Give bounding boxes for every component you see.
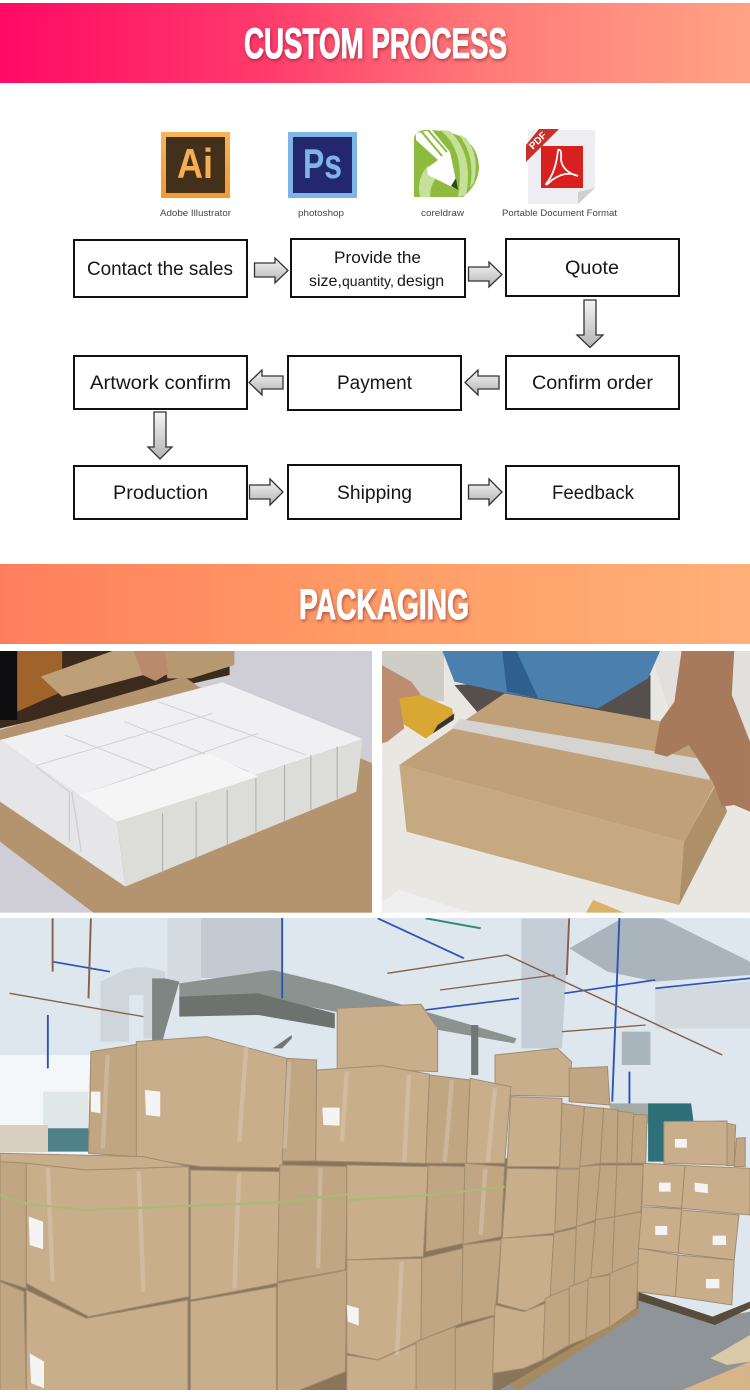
step: provide size, quantity, design: design — [397, 273, 444, 290]
step: shipping — [288, 465, 461, 519]
software icons row — [160, 129, 617, 219]
step: payment: Payment — [337, 373, 413, 394]
step: confirm order: Confirm order — [532, 373, 654, 394]
step: confirm order — [506, 356, 679, 409]
icon: pdf document: PDF — [527, 130, 549, 152]
arrow: down — [148, 412, 172, 459]
step: provide size, quantity, design: size, — [309, 273, 342, 290]
carton labels — [29, 1090, 726, 1388]
floor and pallets — [493, 1292, 750, 1391]
process flow chart — [74, 239, 679, 519]
icon: adobe illustrator: Ai — [177, 140, 213, 187]
packing tape strips — [48, 1047, 495, 1355]
caption: photoshop: photoshop — [298, 208, 344, 219]
step: provide size, quantity, design: quantity, — [342, 273, 394, 289]
caption: portable document format: Portable Document Format — [502, 208, 617, 219]
step: artwork confirm — [74, 356, 247, 409]
step: quote: Quote — [565, 258, 619, 279]
arrow: left — [465, 370, 499, 395]
step: provide size, quantity, design — [291, 239, 465, 297]
arrow: right — [250, 479, 283, 505]
arrow: right — [468, 262, 502, 287]
step: production — [74, 466, 247, 519]
heading text: custom process: CUSTOM PROCESS — [244, 20, 507, 68]
arrow: left — [249, 370, 283, 395]
photo: warehouse stacked cartons — [0, 918, 750, 1391]
step: quote — [506, 239, 679, 296]
caption: coreldraw: coreldraw — [421, 208, 464, 219]
icon: photoshop: Ps — [303, 140, 342, 187]
step: feedback — [506, 466, 679, 519]
strapping band — [0, 1187, 505, 1210]
step: feedback: Feedback — [552, 483, 634, 504]
carton stack shadow base — [0, 1158, 643, 1391]
arrow: right — [468, 479, 502, 505]
photo: white boxes on cardboard — [0, 651, 372, 913]
caption: adobe illustrator: Adobe Illustrator — [160, 208, 231, 219]
heading band: packaging — [0, 564, 750, 644]
step: provide size, quantity, design: Provide the — [334, 249, 421, 267]
step: production: Production — [113, 483, 208, 504]
step: contact the sales: Contact the sales — [87, 259, 233, 280]
step: artwork confirm: Artwork confirm — [90, 373, 231, 394]
heading band: custom process — [0, 3, 750, 83]
step: shipping: Shipping — [337, 483, 412, 504]
icon: adobe illustrator — [161, 132, 230, 198]
icon: coreldraw — [414, 130, 479, 197]
warehouse background — [0, 918, 750, 1316]
icon: pdf document — [526, 129, 595, 204]
arrow: right — [254, 258, 288, 283]
step: payment — [288, 356, 461, 410]
carton stacks — [0, 1004, 750, 1391]
arrow: down — [577, 300, 603, 348]
icon: photoshop — [288, 132, 357, 198]
step: contact the sales — [74, 240, 247, 297]
heading text: packaging: PACKAGING — [299, 581, 469, 629]
photo: taping a cardboard box — [382, 651, 750, 913]
